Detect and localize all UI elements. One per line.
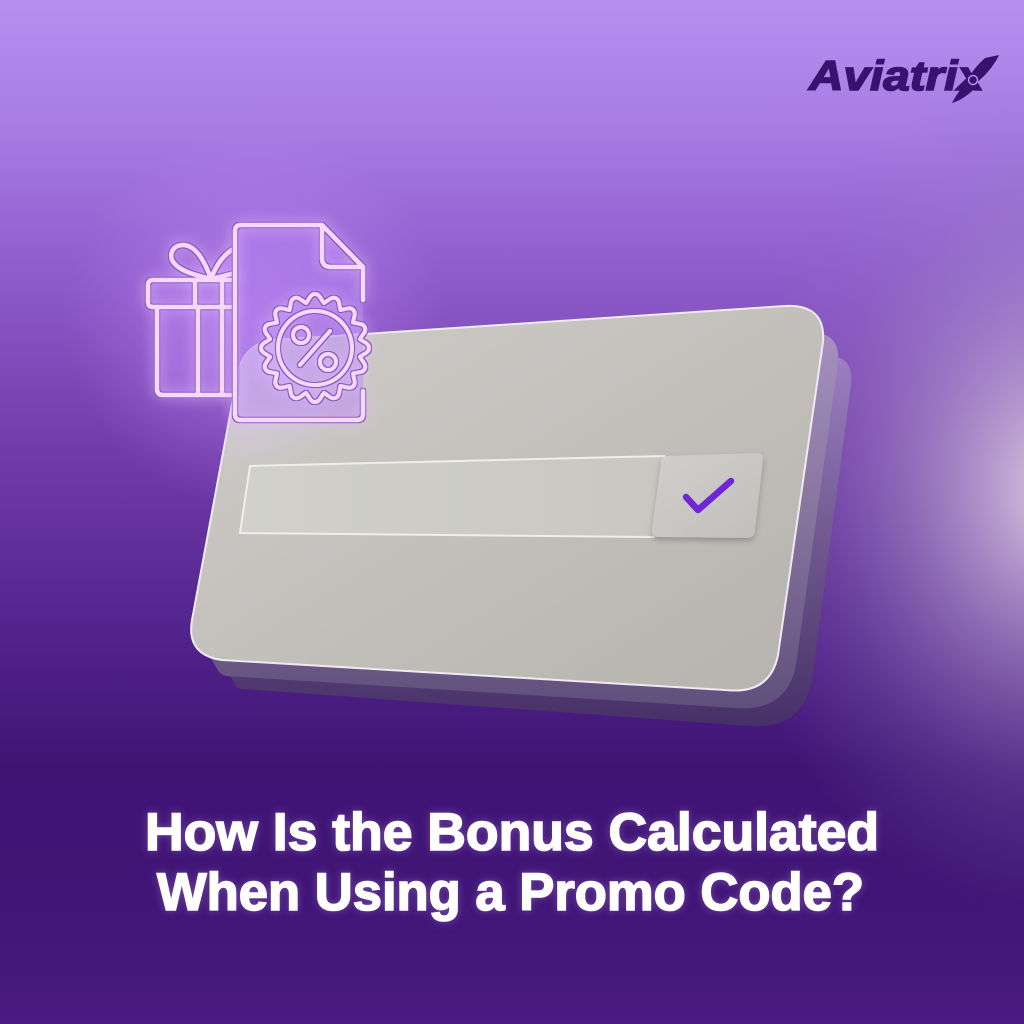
card stack: [191, 306, 851, 726]
title: [145, 803, 879, 922]
card front: [191, 306, 823, 691]
title line 2: When Using a Promo Code?: [157, 863, 864, 922]
title line 1: How Is the Bonus Calculated: [145, 803, 879, 862]
logo: Aviatrix: Aviatrix: [808, 52, 986, 99]
icon: propeller: [952, 55, 999, 103]
input field: [240, 456, 664, 537]
card back layer 1: [200, 333, 838, 708]
icon: gift and promo document: [148, 225, 369, 420]
icon: document: [235, 225, 363, 420]
icon: percent badge: [261, 294, 369, 402]
card back layer 2: [215, 356, 851, 726]
icon: gift box: [148, 245, 235, 395]
submit button: [652, 453, 763, 538]
icon: check mark: [686, 481, 731, 510]
